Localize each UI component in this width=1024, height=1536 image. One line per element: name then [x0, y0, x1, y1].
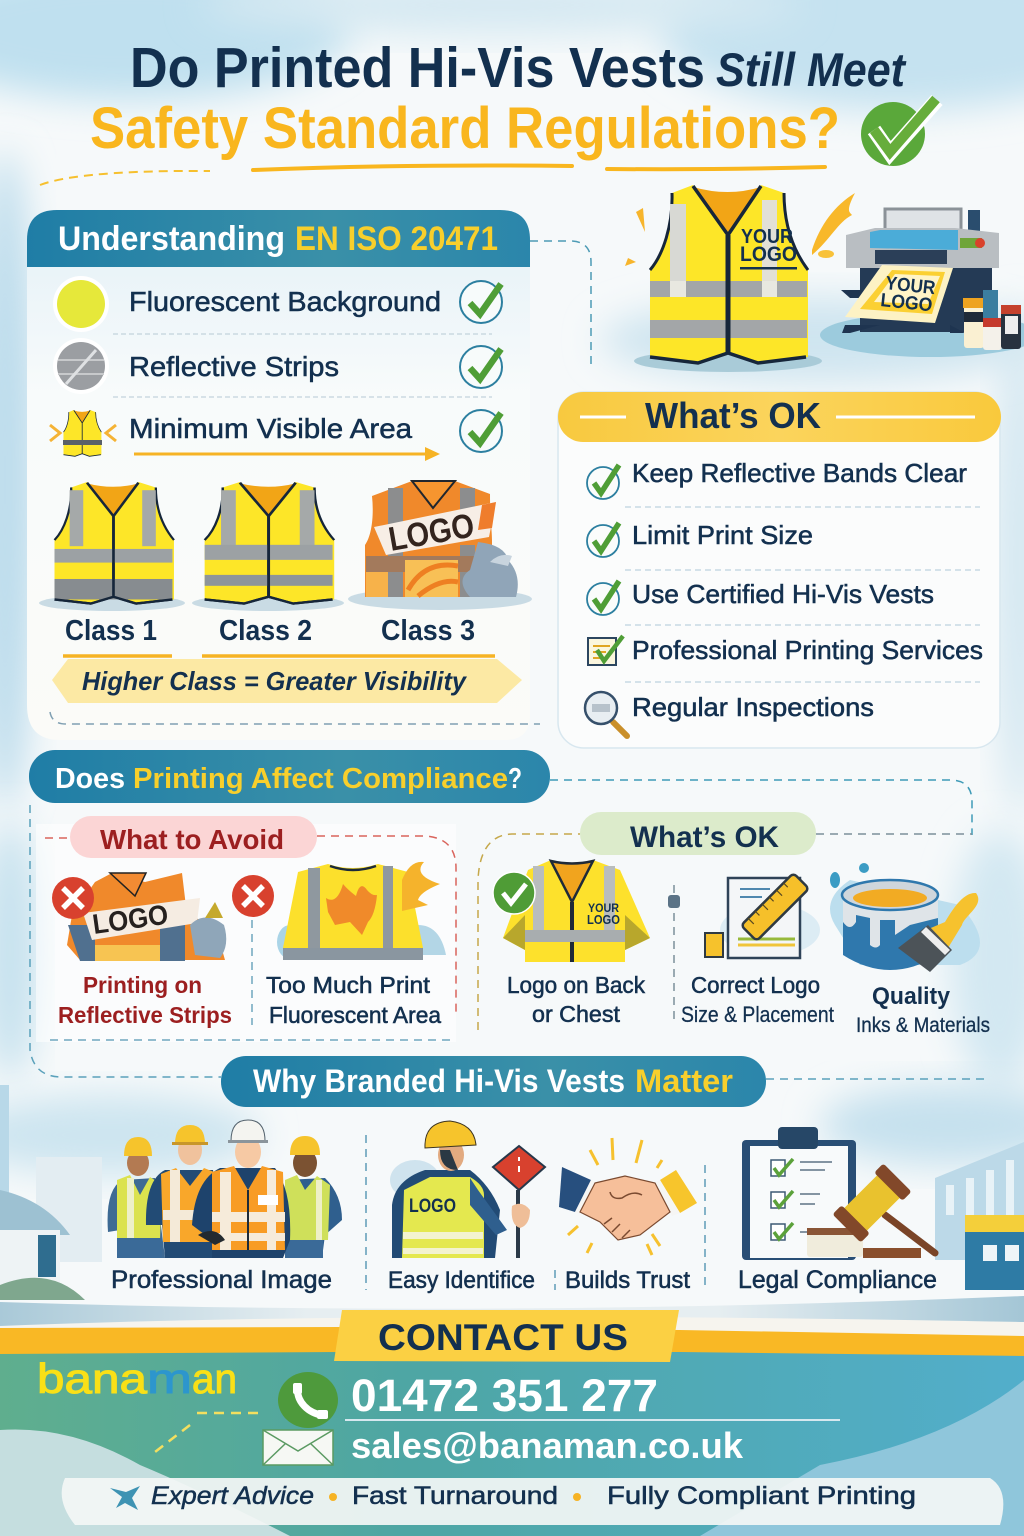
row: minimum visible area: Minimum Visible Area [129, 413, 412, 444]
example: printing on reflective strips: LOGO [91, 899, 170, 940]
logo: banaman: an [192, 1355, 237, 1402]
heading: what's OK: What’s OK [630, 821, 779, 854]
title: Safety Standard Regulations? [90, 96, 840, 161]
item: regular inspections [585, 692, 874, 736]
row labels: Builds Trust [565, 1267, 690, 1294]
header: what's OK: What’s OK [645, 395, 821, 436]
example: logo on back or chest [493, 860, 650, 1027]
example: logo on back or chest: Logo on Back [507, 972, 645, 998]
class labels: Class 2 [219, 615, 312, 647]
row labels: Easy Identifice [388, 1267, 535, 1294]
strapline: Fast Turnaround [352, 1482, 558, 1510]
row: minimum visible area [50, 410, 502, 461]
heading: does printing affect compliance [29, 750, 550, 803]
strapline: Fully Compliant Printing [607, 1482, 916, 1510]
example: printing on reflective strips: Printing on [83, 972, 202, 998]
heading: does printing affect compliance: Printing Affect Compliance [133, 763, 508, 795]
item: limit print size: Limit Print Size [632, 520, 813, 550]
row labels: Legal Compliance [738, 1266, 937, 1294]
logo: banaman: bana [37, 1355, 148, 1402]
row: reflective strips [53, 338, 502, 394]
icon: phone [278, 1372, 338, 1428]
item: keep reflective bands clear: Keep Reflective Bands Clear [632, 458, 967, 488]
footer: contact section [0, 1296, 1024, 1536]
scenery: left buildings [0, 1085, 102, 1300]
email address: sales@banaman.co.uk [351, 1425, 744, 1466]
example: quality inks and materials: Quality [872, 983, 951, 1010]
heading: why branded vests matter: Why Branded Hi-Vis Vests [253, 1063, 625, 1099]
logo: banaman [37, 1355, 260, 1452]
worker 2 [146, 1125, 222, 1258]
example: correct logo size and placement: Correct Logo [691, 972, 820, 998]
banner: higher class [52, 659, 522, 703]
illustration: printer: YOUR [884, 273, 937, 299]
item: use certified vests: Use Certified Hi-Vis Vests [632, 579, 934, 609]
heading: what's OK [580, 812, 816, 855]
panel: what to avoid [36, 816, 456, 1042]
illustration: handshake [559, 1138, 697, 1255]
row labels: Professional Image [111, 1266, 332, 1294]
icon: title check mark [861, 99, 937, 166]
example: too much print: Fluorescent Area [269, 1002, 441, 1028]
example: printing on reflective strips: Reflective Strips [58, 1002, 232, 1028]
illustration: hero vest [625, 185, 855, 372]
row: reflective strips: Reflective Strips [129, 351, 339, 382]
banner: higher class: Higher Class = Greater Visibility [82, 666, 467, 696]
row labels [111, 1135, 937, 1294]
class labels: Class 3 [381, 615, 475, 647]
illustration: printer: LOGO [879, 290, 933, 316]
banner: contact us: CONTACT US [378, 1317, 628, 1358]
example: logo on back or chest: or Chest [532, 1001, 621, 1027]
heading: does printing affect compliance: ? [508, 763, 522, 795]
panel header: EN ISO 20471 [295, 220, 498, 258]
item: keep reflective bands clear [587, 458, 967, 499]
title: Do Printed Hi-Vis Vests [130, 36, 705, 100]
section frame: compliance dashes [30, 780, 985, 1079]
example: logo on back or chest: YOUR [588, 901, 619, 915]
example: quality inks and materials: Inks & Materials [856, 1014, 990, 1037]
vest: class 3 with logo [348, 481, 532, 610]
illustration: hero vest: YOUR [741, 226, 793, 248]
panel: understanding EN ISO 20471 [27, 210, 540, 740]
illustration: hero vest: LOGO [740, 243, 797, 266]
class labels: Class 1 [65, 615, 157, 647]
panel header [27, 210, 530, 267]
example: printing on reflective strips [52, 873, 232, 1028]
heading: what to avoid [70, 816, 317, 858]
illustration: worker with logo and sign: LOGO [409, 1196, 456, 1217]
illustration: worker with logo and sign [390, 1121, 545, 1258]
class labels [63, 615, 495, 656]
illustration: clipboard and gavel [742, 1127, 935, 1260]
heading: does printing affect compliance: Does [55, 763, 125, 795]
example: too much print [232, 862, 446, 1028]
worker 4 [285, 1136, 342, 1258]
heading: what to avoid: What to Avoid [100, 824, 284, 855]
example: too much print: Too Much Print [266, 972, 431, 998]
item: professional printing: Professional Printing Services [632, 635, 983, 665]
illustration: printer [820, 209, 1024, 357]
scenery: right buildings [935, 1142, 1024, 1290]
example: correct logo size and placement [681, 873, 834, 1027]
row: fluorescent background: Fluorescent Background [129, 286, 441, 317]
title: Still Meet [716, 43, 907, 96]
panel: what's OK examples [478, 812, 990, 1037]
vest: class 1 [39, 482, 185, 611]
heading: why branded vests matter: Matter [635, 1063, 733, 1099]
vest: class 2 [192, 482, 344, 611]
icon: envelope [263, 1430, 333, 1465]
header: what's OK [558, 392, 1001, 442]
item: limit print size [587, 520, 813, 557]
panel header: Understanding [58, 220, 285, 258]
worker 1 [108, 1137, 165, 1258]
example: correct logo size and placement: Size & Placement [681, 1002, 834, 1027]
strapline [110, 1482, 916, 1510]
row: fluorescent background [53, 276, 502, 332]
title [40, 36, 907, 185]
item: regular inspections: Regular Inspections [632, 692, 874, 722]
phone number: 01472 351 277 [351, 1370, 658, 1421]
example: logo on back or chest: LOGO [587, 912, 620, 927]
banner: contact us [334, 1310, 679, 1362]
worker 3 [192, 1120, 290, 1258]
illustration: team of workers [108, 1120, 342, 1258]
heading: why branded vests matter [221, 1056, 766, 1107]
logo: banaman: m [147, 1355, 192, 1402]
strapline: Expert Advice [151, 1482, 314, 1510]
vest: class 3 with logo: LOGO [386, 507, 477, 559]
panel: what's OK list [558, 392, 1001, 748]
example: quality inks and materials [830, 863, 990, 1037]
